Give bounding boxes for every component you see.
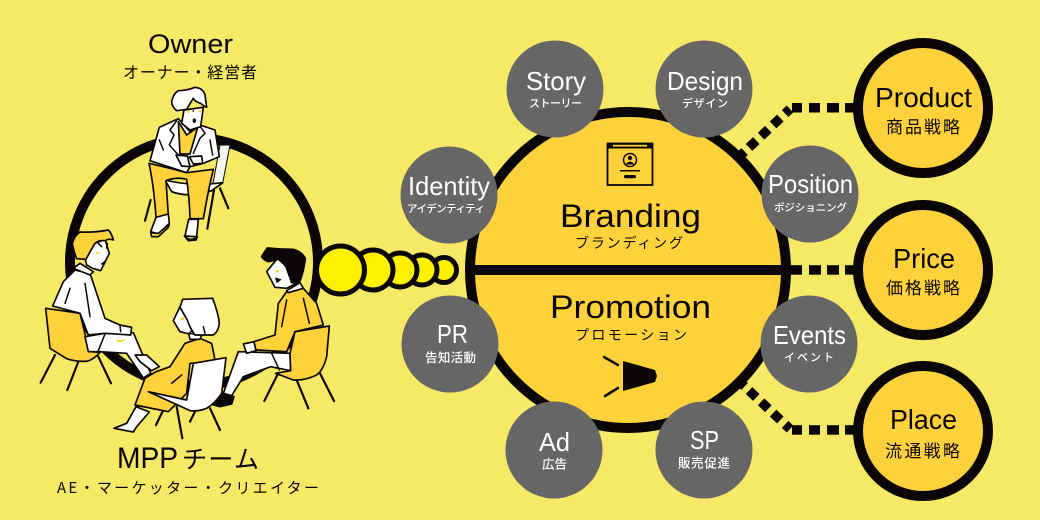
node: PR: PR — [437, 319, 468, 349]
node: PR — [402, 296, 498, 392]
heading: Promotion: Promotion — [550, 289, 711, 325]
connector: yellow bubbles — [316, 246, 456, 294]
connector: product — [741, 103, 855, 155]
heading: Promotion — [550, 289, 711, 345]
heading: MPP team: AE・マーケッター・クリエイター — [57, 477, 319, 498]
icon: branding browser — [607, 143, 653, 185]
node: Product: Product — [875, 82, 972, 113]
node: Events — [760, 296, 858, 392]
heading: MPP team: チーム — [182, 440, 259, 476]
node: Story: ストーリー — [529, 95, 582, 111]
node: Ad: Ad — [539, 427, 570, 457]
node: Identity: アイデンティティ — [407, 201, 485, 216]
icon: megaphone — [604, 357, 657, 396]
node: Place: Place — [890, 404, 957, 435]
panel: central circle — [470, 112, 786, 428]
heading: Owner: オーナー・経営者 — [123, 59, 257, 83]
connector: price — [788, 265, 855, 275]
node: Design: デザイン — [682, 95, 728, 111]
team ring — [70, 138, 318, 386]
node: Design — [656, 40, 752, 138]
node: SP: 販売促進 — [678, 452, 730, 472]
node: Story: Story — [526, 66, 586, 96]
node: Price: 価格戦略 — [886, 274, 960, 299]
node: Place — [858, 366, 988, 496]
node: Events: イベント — [784, 349, 834, 365]
node: Identity: Identity — [408, 171, 490, 201]
node: SP: SP — [690, 425, 719, 455]
heading: MPP team: MPP — [117, 442, 178, 475]
illustration: MPP team seated — [41, 230, 334, 438]
node: Place: 流通戦略 — [885, 437, 960, 462]
node: Story — [506, 40, 604, 138]
node: Design: Design — [667, 66, 743, 96]
node: Ad: 広告 — [542, 454, 567, 472]
node: Ad — [506, 402, 602, 498]
node: Price — [858, 205, 988, 335]
connector: place — [741, 383, 855, 435]
node: SP — [656, 402, 752, 498]
heading: Branding: Branding — [560, 198, 701, 234]
node: Position: ポジショニング — [774, 200, 848, 215]
node: Identity — [400, 146, 498, 244]
heading: Promotion: プロモーション — [575, 325, 687, 345]
heading: Branding: ブランディング — [575, 233, 683, 253]
node: Price: Price — [893, 243, 955, 274]
node: Position: Position — [768, 169, 853, 199]
heading: MPP team — [57, 440, 319, 498]
node: Events: Events — [773, 320, 846, 350]
node: Product — [858, 43, 988, 173]
node: Product: 商品戦略 — [886, 113, 960, 138]
heading: Owner: Owner — [148, 29, 233, 59]
figure: left man — [41, 230, 151, 390]
heading: Branding — [560, 198, 701, 253]
node: PR: 告知活動 — [425, 347, 476, 366]
illustration: owner seated — [145, 87, 230, 241]
figure: woman — [114, 298, 226, 438]
figure: right man — [213, 248, 334, 408]
heading: Owner — [123, 29, 257, 83]
node: Position — [762, 146, 858, 242]
